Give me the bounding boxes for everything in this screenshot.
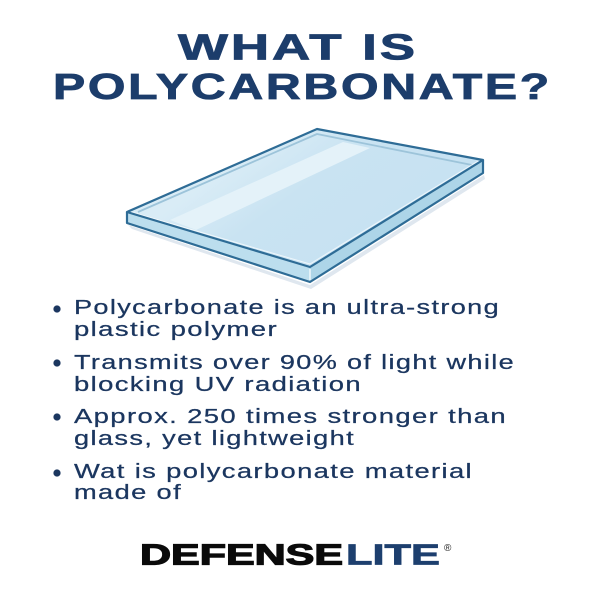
front corner highlight xyxy=(309,269,311,280)
sheet top face xyxy=(127,129,483,267)
sheet shadow xyxy=(128,175,485,289)
title xyxy=(53,26,552,107)
logo: DEFENSELITE xyxy=(140,540,452,572)
bullet 4 xyxy=(54,461,473,504)
bullet 2: blocking UV radiation xyxy=(74,374,362,396)
title: POLYCARBONATE? xyxy=(53,66,552,107)
front edge highlight xyxy=(131,161,478,264)
bullet 2: Transmits over 90% of light while xyxy=(74,352,515,374)
logo: DEFENSELITE: LITE xyxy=(346,540,440,572)
title: WHAT IS xyxy=(178,26,418,68)
right side face xyxy=(310,160,483,282)
bullet 2 xyxy=(54,352,515,396)
sheet outline xyxy=(127,129,483,282)
bullet 3 xyxy=(54,406,507,450)
bullet 4: Wat is polycarbonate material xyxy=(74,461,473,483)
light band xyxy=(170,142,370,230)
bullet 1: Polycarbonate is an ultra-strong xyxy=(74,297,500,319)
illustration: polycarbonate sheet xyxy=(127,129,485,289)
bullet list xyxy=(54,297,515,504)
bullet 1 xyxy=(54,297,500,341)
left side face xyxy=(127,212,310,282)
bullet 1: plastic polymer xyxy=(74,319,278,341)
inner edge xyxy=(138,134,472,212)
logo: DEFENSELITE: ® xyxy=(444,543,452,554)
bullet 3: Approx. 250 times stronger than xyxy=(74,406,507,428)
bullet 4: made of xyxy=(74,482,182,504)
bullet 3: glass, yet lightweight xyxy=(74,428,355,450)
logo: DEFENSELITE: DEFENSE xyxy=(140,540,343,572)
